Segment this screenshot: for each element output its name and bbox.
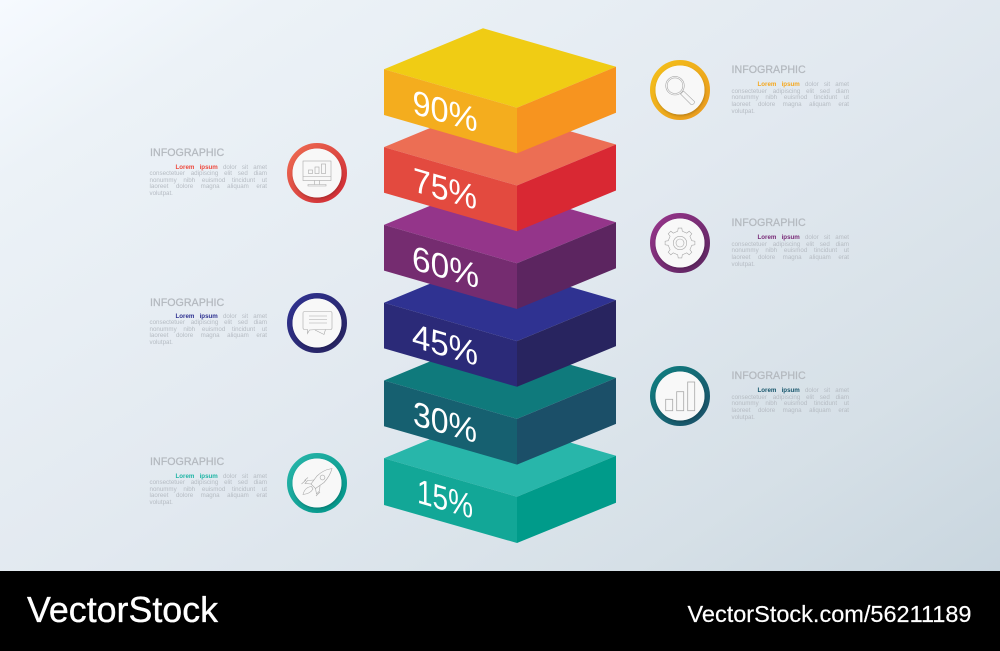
text block — [732, 81, 849, 115]
block: 90% — [384, 28, 616, 153]
text block: volutpat. — [150, 499, 173, 506]
panel: monitor (left 1) — [150, 143, 347, 203]
footer logo: VectorStock — [27, 589, 219, 630]
icon: monitor badge — [287, 143, 347, 203]
text block: nonummy nibh euismod tincidunt ut — [732, 400, 849, 407]
panel: magnifier (right 1) — [650, 60, 849, 120]
text block: consectetuer adipiscing elit sed diam — [150, 319, 267, 326]
text block: consectetuer adipiscing elit sed diam — [732, 88, 849, 95]
footer image id: VectorStock.com/56211189 — [688, 601, 972, 627]
text block: laoreet dolore magna aliquam erat — [732, 101, 849, 108]
block: 15%: 15% — [417, 472, 473, 527]
text block: laoreet dolore magna aliquam erat — [732, 407, 849, 414]
block: 75%: 75% — [413, 161, 477, 218]
heading: INFOGRAPHIC — [150, 147, 224, 159]
text block: volutpat. — [150, 190, 173, 197]
text block — [150, 164, 267, 197]
heading: INFOGRAPHIC — [150, 456, 224, 468]
text block: nonummy nibh euismod tincidunt ut — [150, 326, 267, 333]
panel: chat (left 2) — [150, 293, 347, 353]
text block: Lorem ipsum dolor sit amet — [758, 81, 849, 88]
panel: rocket (left 3) — [150, 453, 347, 513]
icon: gear badge — [650, 213, 710, 273]
icon: chat badge — [287, 293, 347, 353]
text block: volutpat. — [150, 339, 173, 346]
footer bar — [0, 571, 1000, 651]
block: 30% — [384, 340, 616, 465]
text block: nonummy nibh euismod tincidunt ut — [732, 94, 849, 101]
text block: laoreet dolore magna aliquam erat — [732, 254, 849, 261]
text block: nonummy nibh euismod tincidunt ut — [732, 247, 849, 254]
text block: volutpat. — [732, 108, 755, 115]
block: 30%: 30% — [413, 394, 477, 451]
text block — [150, 312, 267, 346]
block: 15% — [384, 417, 616, 543]
text block: volutpat. — [732, 414, 755, 421]
heading: INFOGRAPHIC — [732, 217, 806, 229]
text block: Lorem ipsum dolor sit amet — [758, 234, 849, 241]
text block: consectetuer adipiscing elit sed diam — [732, 394, 849, 401]
text block: laoreet dolore magna aliquam erat — [150, 332, 267, 339]
text block — [732, 387, 849, 421]
text block — [732, 234, 849, 268]
icon: bar chart badge — [650, 366, 710, 426]
icon: rocket badge — [287, 453, 347, 513]
text block: consectetuer adipiscing elit sed diam — [732, 241, 849, 248]
panel: gear (right 2) — [650, 213, 849, 273]
block: 45% — [384, 262, 616, 387]
text block: nonummy nibh euismod tincidunt ut — [150, 486, 267, 493]
heading: INFOGRAPHIC — [150, 296, 224, 308]
text block: Lorem ipsum dolor sit amet — [176, 472, 267, 480]
block: 75% — [384, 106, 616, 231]
text block: Lorem ipsum dolor sit amet — [758, 387, 849, 394]
heading: INFOGRAPHIC — [732, 64, 806, 76]
block: 45%: 45% — [412, 317, 478, 374]
heading: INFOGRAPHIC — [732, 370, 806, 382]
block: 60%: 60% — [412, 239, 479, 296]
text block — [150, 472, 267, 506]
text block: Lorem ipsum dolor sit amet — [176, 164, 267, 170]
text block: consectetuer adipiscing elit sed diam — [150, 170, 267, 177]
icon: magnifier badge — [650, 60, 710, 120]
text block: laoreet dolore magna aliquam erat — [150, 492, 267, 499]
panel: bar chart (right 3) — [650, 366, 849, 426]
block: 90%: 90% — [412, 83, 478, 140]
text block: volutpat. — [732, 261, 755, 268]
block: 60% — [384, 184, 616, 309]
text block: nonummy nibh euismod tincidunt ut — [150, 177, 267, 184]
text block: consectetuer adipiscing elit sed diam — [150, 479, 267, 486]
text block: Lorem ipsum dolor sit amet — [176, 312, 267, 320]
text block: laoreet dolore magna aliquam erat — [150, 183, 267, 190]
